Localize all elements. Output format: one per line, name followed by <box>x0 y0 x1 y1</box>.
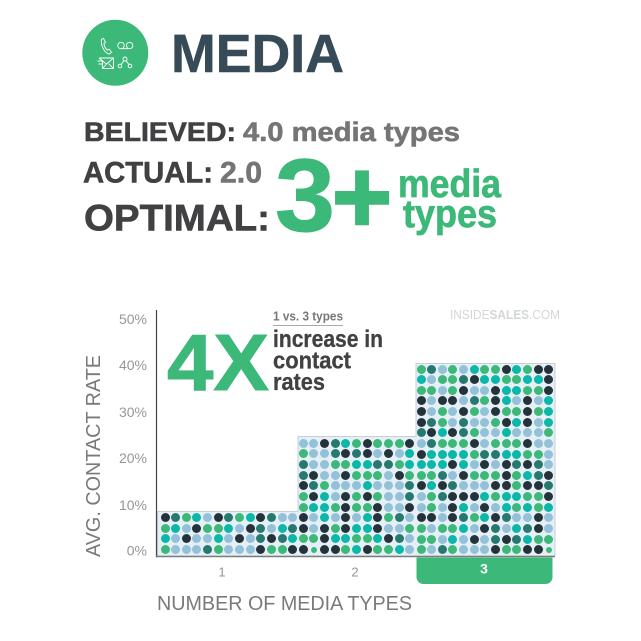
icon: voicemail <box>118 42 133 49</box>
dot bar: 2 media types <box>299 439 414 554</box>
x axis labels: 2 <box>351 564 359 580</box>
optimal value: 3 <box>275 138 335 253</box>
y axis labels: 50% <box>119 311 147 327</box>
y axis labels <box>119 311 147 558</box>
callout text: rates <box>273 369 325 396</box>
icon: envelope <box>98 58 114 68</box>
callout text <box>273 326 383 396</box>
callout text: contact <box>273 348 351 374</box>
icon: network nodes <box>118 57 132 68</box>
x axis baseline <box>156 556 555 558</box>
believed value: 4.0 media types <box>243 117 460 147</box>
actual label: ACTUAL: <box>83 156 213 190</box>
y axis labels: 30% <box>119 404 147 420</box>
watermark: INSIDESALES.COM <box>450 308 560 322</box>
believed label: BELIEVED: <box>84 117 236 147</box>
optimal unit <box>398 163 501 236</box>
title: MEDIA <box>171 24 344 84</box>
comparison label: 1 vs. 3 types <box>273 308 343 324</box>
x axis labels <box>218 560 488 580</box>
icon: phone <box>101 38 112 54</box>
x axis labels: 3 <box>480 560 488 576</box>
optimal value <box>275 138 392 254</box>
callout text: increase in <box>273 326 383 353</box>
x axis title: NUMBER OF MEDIA TYPES <box>157 593 412 615</box>
optimal unit: media <box>398 163 501 206</box>
y axis labels: 0% <box>127 542 147 558</box>
y axis labels: 20% <box>119 450 147 466</box>
icon: media channels badge <box>82 20 148 86</box>
y axis labels: 10% <box>119 497 147 513</box>
x axis labels: 1 <box>218 564 226 580</box>
y axis title: AVG. CONTACT RATE <box>83 355 105 557</box>
dot bar: 1 media type <box>161 513 297 554</box>
axes <box>156 310 158 558</box>
highlighted category tab <box>416 558 552 584</box>
bars background <box>158 364 555 556</box>
big multiplier: 4X <box>167 318 269 407</box>
optimal value: + <box>332 139 392 254</box>
dot bar: 3 media types <box>417 365 553 554</box>
optimal unit: types <box>403 193 497 236</box>
optimal label: OPTIMAL: <box>84 198 270 238</box>
y axis labels: 40% <box>119 357 147 373</box>
actual value: 2.0 <box>220 156 262 190</box>
